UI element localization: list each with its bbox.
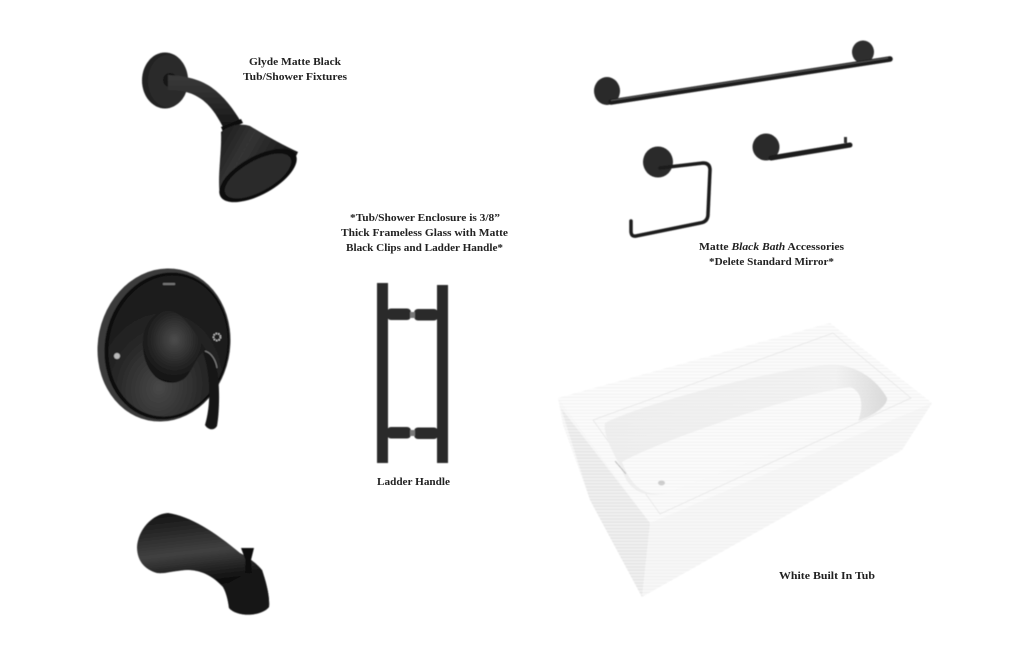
icon: ladder handle [377,283,448,463]
caption: shower fixtures: Tub/Shower Fixtures [243,71,348,83]
caption: enclosure note [341,212,508,254]
icon: towel bar [594,40,890,105]
icon: shower head [142,52,305,213]
caption: bath accessories: Matte Black Bath Accessories [699,241,845,253]
icon: toilet paper holder [752,134,850,160]
icon: tub spout [137,513,269,615]
caption: shower fixtures: Glyde Matte Black [249,56,342,68]
icon: towel ring [631,146,710,236]
caption: enclosure note: Thick Frameless Glass with Matte [341,227,508,239]
caption: enclosure note: *Tub/Shower Enclosure is 3/8” [350,212,500,224]
caption: bath accessories [699,241,845,268]
caption: enclosure note: Black Clips and Ladder Handle* [346,242,504,254]
caption: ladder handle: Ladder Handle [377,476,450,488]
caption: shower fixtures [243,56,348,83]
icon: white built-in tub [558,323,932,597]
icon: shower valve trim plate [83,256,245,434]
caption: white tub: White Built In Tub [779,570,875,582]
caption: bath accessories: *Delete Standard Mirror* [709,256,835,268]
